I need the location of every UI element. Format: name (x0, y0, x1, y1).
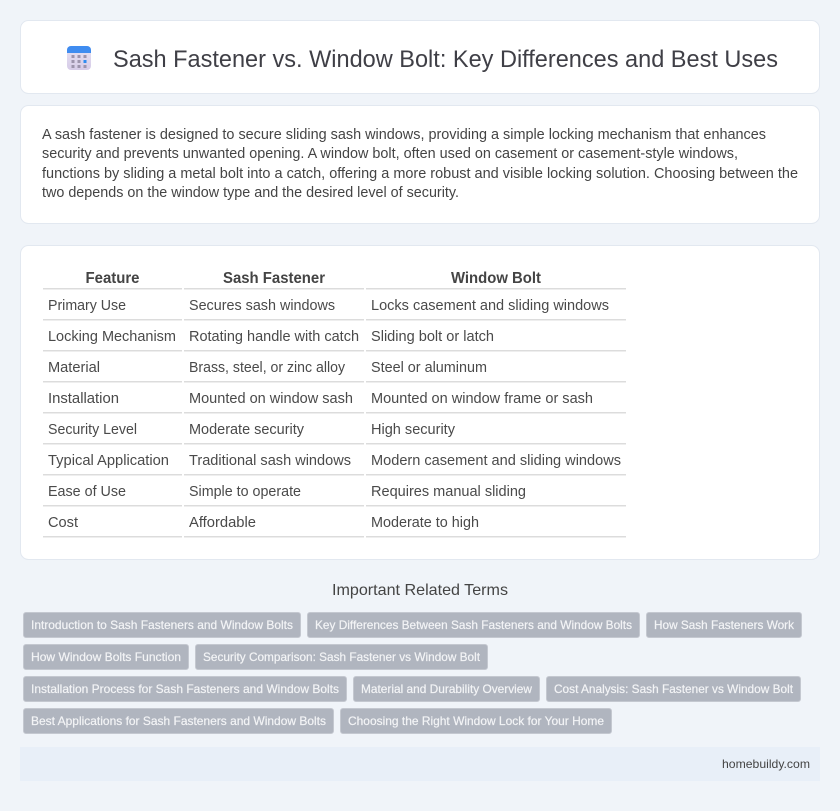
tag (24, 612, 300, 638)
row: material: Material (48, 360, 100, 376)
row: ease of use: Simple to operate (189, 484, 301, 500)
row: material: Steel or aluminum (371, 360, 487, 376)
tag: Key Differences Between Sash Fasteners and Window Bolts (315, 618, 632, 632)
row: cost: Cost (48, 515, 78, 531)
row: typical application: Typical Application (48, 453, 169, 469)
row: primary use: Locks casement and sliding windows (371, 298, 609, 314)
tag (340, 708, 612, 734)
row: primary use (48, 298, 609, 314)
tag: Cost Analysis: Sash Fastener vs Window Bolt (554, 682, 794, 696)
row: typical application (48, 453, 621, 469)
row: security level: Security Level (48, 422, 137, 438)
row: ease of use: Ease of Use (48, 484, 126, 500)
table header row: Feature (86, 270, 140, 287)
tag: Installation Process for Sash Fasteners and Window Bolts (31, 682, 339, 696)
title: Sash Fastener vs. Window Bolt: Key Differences and Best Uses (113, 46, 778, 73)
tag (354, 676, 540, 702)
row: locking mechanism: Rotating handle with catch (189, 329, 359, 345)
row: cost: Moderate to high (371, 515, 479, 531)
panel: intro paragraph: functions by sliding a metal bolt into a catch, offering a more robust and visible locking solution. Choosing between the (42, 166, 798, 182)
icon: calendar grid (67, 46, 91, 70)
tag: Material and Durability Overview (361, 682, 532, 696)
panel: related term tags (24, 612, 802, 734)
table header row (86, 270, 541, 287)
row: locking mechanism: Sliding bolt or latch (371, 329, 494, 345)
row: installation: Mounted on window frame or sash (371, 391, 593, 407)
footer (20, 747, 820, 781)
panel: intro paragraph: A sash fastener is designed to secure sliding sash windows, providing a simple locking mechanism that enhances (42, 127, 766, 143)
heading: important related terms: Important Related Terms (332, 582, 508, 599)
row: security level: Moderate security (189, 422, 305, 438)
row: cost (48, 515, 479, 531)
row: material (48, 360, 487, 376)
footer: homebuildy.com (722, 757, 810, 771)
row: typical application: Traditional sash windows (189, 453, 351, 469)
row: primary use: Primary Use (48, 298, 126, 314)
tag: Security Comparison: Sash Fastener vs Window Bolt (203, 650, 481, 664)
tag (308, 612, 640, 638)
row: security level (48, 422, 456, 438)
row: typical application: Modern casement and sliding windows (371, 453, 621, 469)
tag (24, 644, 188, 670)
row: cost: Affordable (189, 515, 256, 531)
row: installation: Mounted on window sash (189, 391, 353, 407)
row: locking mechanism (48, 329, 494, 345)
panel: intro paragraph: two depends on the window type and the desired level of security. (42, 185, 459, 201)
row: installation (48, 391, 593, 407)
tag (646, 612, 802, 638)
tag (24, 676, 346, 702)
row: locking mechanism: Locking Mechanism (48, 329, 176, 345)
tag: How Sash Fasteners Work (654, 618, 795, 632)
panel: intro paragraph (20, 106, 820, 224)
panel: intro paragraph: security and prevents unwanted opening. A window bolt, often used on casement or casement-style windows, (42, 146, 738, 162)
row: ease of use: Requires manual sliding (371, 484, 526, 500)
panel: comparison table (20, 246, 820, 560)
row: material: Brass, steel, or zinc alloy (189, 360, 346, 376)
tag: Choosing the Right Window Lock for Your Home (348, 714, 604, 728)
table header row: Window Bolt (451, 270, 541, 287)
tag: Introduction to Sash Fasteners and Window Bolts (31, 618, 293, 632)
tag (546, 676, 800, 702)
tag: How Window Bolts Function (31, 650, 181, 664)
tag: Best Applications for Sash Fasteners and Window Bolts (31, 714, 326, 728)
row: primary use: Secures sash windows (189, 298, 335, 314)
tag (24, 708, 334, 734)
row: installation: Installation (48, 391, 119, 407)
row: ease of use (48, 484, 526, 500)
table header row: Sash Fastener (223, 270, 325, 287)
row: security level: High security (371, 422, 456, 438)
header panel (20, 20, 820, 94)
tag (196, 644, 488, 670)
